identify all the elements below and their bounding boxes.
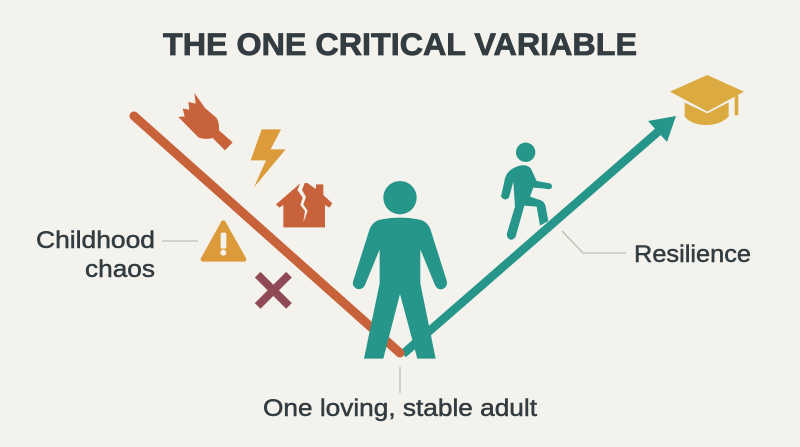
icon: red cross	[258, 275, 289, 306]
label: childhood chaos	[36, 227, 198, 283]
declining orange chaos line	[134, 116, 400, 353]
icon: cracked house	[276, 182, 332, 227]
label: childhood chaos: Childhood	[36, 227, 155, 254]
icon: graduation cap	[670, 75, 744, 125]
icon: warning triangle	[203, 223, 244, 259]
label: one loving, stable adult: One loving, stable adult	[263, 395, 537, 422]
label: childhood chaos: chaos	[85, 256, 155, 283]
label: resilience: Resilience	[634, 241, 751, 268]
icon: climbing figure	[501, 143, 552, 240]
icon: lightning bolt	[251, 129, 286, 187]
title: THE ONE CRITICAL VARIABLE	[163, 26, 637, 62]
label: resilience	[562, 231, 751, 268]
icon: central adult figure	[353, 181, 447, 359]
arrow: rising teal resilience line	[403, 116, 676, 354]
icon: broken bottle	[178, 93, 233, 150]
